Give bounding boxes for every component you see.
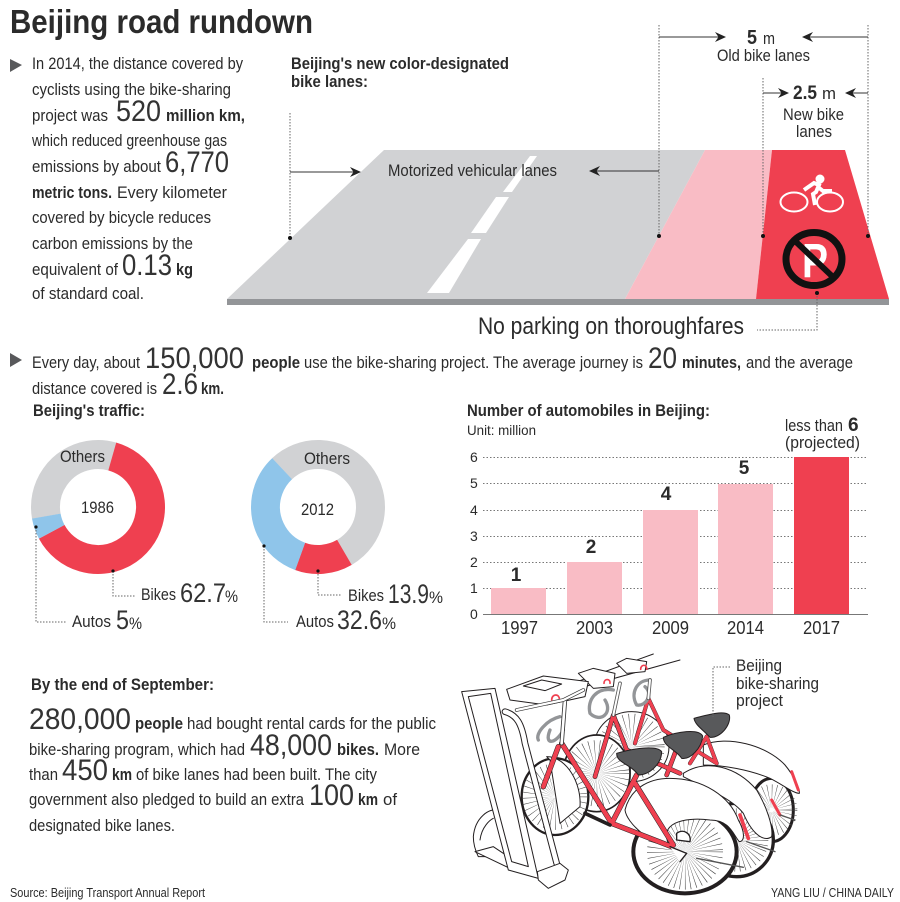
bar chart: 3: [470, 528, 478, 544]
donut chart: 1986: %: [129, 615, 142, 633]
text block: cycling distance and emissions: million km,: [166, 107, 245, 125]
heading: bike lanes: Beijing's new color-designated: [291, 55, 509, 73]
text block: cycling distance and emissions: covered by bicycle reduces: [32, 209, 211, 227]
road dimension lines and labels: [288, 25, 870, 240]
donut chart: 1986: 5: [116, 605, 129, 635]
callout: bike-sharing project: [713, 657, 819, 717]
bar chart: 1: [511, 565, 522, 586]
text block: daily use: and the average: [746, 354, 853, 372]
donut chart: 2012: %: [429, 589, 443, 607]
road dimension lines and labels: 5: [747, 27, 757, 49]
title: Beijing road rundown: [10, 3, 313, 40]
bar chart: 1: [470, 580, 478, 596]
text block: cycling distance and emissions: carbon emissions by the: [32, 235, 193, 253]
text block: daily use: minutes,: [682, 354, 741, 372]
text block: cycling distance and emissions: 520: [116, 95, 161, 128]
donut chart: 1986: Autos: [72, 613, 111, 631]
text block: cycling distance and emissions: In 2014, the distance covered by: [32, 55, 244, 73]
bar chart: 2009: [652, 618, 689, 638]
road dimension lines and labels: m: [763, 30, 775, 48]
heading: traffic: Beijing's traffic:: [33, 402, 145, 420]
donut chart: 2012: 32.6: [337, 605, 382, 635]
docking post: [462, 688, 568, 888]
text block: daily use: distance covered is: [32, 380, 157, 398]
text block: cycling distance and emissions: equivalent of: [32, 261, 118, 279]
bar chart: 6: [848, 415, 859, 436]
text block: cycling distance and emissions: metric tons.: [32, 184, 112, 202]
text block: by the end of September: than: [29, 766, 58, 784]
bar chart: 5: [470, 475, 478, 491]
text block: cycling distance and emissions: kg: [176, 261, 193, 279]
callout: bike-sharing project: Beijing: [736, 657, 782, 675]
text block: by the end of September: [29, 676, 436, 835]
text block: by the end of September: By the end of September:: [31, 676, 214, 694]
heading: bike lanes: [291, 55, 509, 91]
road dimension lines and labels: Motorized vehicular lanes: [388, 162, 557, 180]
donut chart: 1986: 1986: [81, 499, 114, 517]
text block: daily use: Every day, about: [32, 354, 140, 372]
text block: cycling distance and emissions: which reduced greenhouse gas: [31, 132, 227, 150]
bar chart: 5: [739, 458, 750, 479]
callout: bike-sharing project: bike-sharing: [736, 675, 819, 693]
callout: bike-sharing project: project: [736, 692, 783, 710]
bar chart: 4: [661, 484, 672, 505]
text block: by the end of September: 450: [62, 754, 108, 787]
text block: by the end of September: 100: [309, 779, 354, 812]
icon: no parking: [786, 232, 842, 288]
text block: cycling distance and emissions: cyclists using the bike-sharing: [32, 81, 231, 99]
donut chart: 2012: [244, 433, 443, 635]
text block: daily use: 2.6: [162, 368, 198, 401]
text block: daily use: 150,000: [145, 342, 244, 375]
donut chart: 1986: 62.7: [180, 578, 226, 608]
donut chart: 2012: Others: [304, 450, 350, 468]
bar chart: 2017: [803, 618, 840, 638]
donut chart: 2012: %: [382, 615, 396, 633]
text block: by the end of September: bikes.: [337, 741, 379, 759]
donut chart: 2012: Bikes: [348, 587, 384, 605]
text block: cycling distance and emissions: [10, 55, 245, 303]
text block: cycling distance and emissions: emissions by about: [32, 158, 161, 176]
back bike: [594, 680, 799, 842]
text block: daily use: people: [252, 354, 300, 372]
bar chart: 6: [470, 449, 478, 465]
text block: by the end of September: people: [135, 715, 183, 733]
donut chart: 2012: 2012: [301, 501, 334, 519]
text block: daily use: use the bike-sharing project. The average journey is: [304, 354, 643, 372]
donut chart: 1986: Bikes: [141, 586, 176, 604]
callout: no parking: [478, 291, 819, 340]
text block: by the end of September: bike-sharing program, which had: [29, 741, 245, 759]
road dimension lines and labels: New bike: [783, 106, 844, 124]
road dimension lines and labels: Old bike lanes: [717, 47, 810, 65]
text block: by the end of September: of bike lanes had been built. The city: [136, 766, 378, 784]
bar chart: 2: [586, 537, 596, 558]
text block: daily use: km.: [201, 380, 224, 398]
donut chart: 1986: %: [225, 588, 238, 606]
donut chart: 1986: [27, 436, 238, 635]
text block: daily use: [10, 342, 853, 401]
text block: by the end of September: government also pledged to build an extra: [29, 791, 305, 809]
donut chart: 2012: 13.9: [388, 579, 429, 609]
callout: no parking: No parking on thoroughfares: [478, 313, 744, 340]
illustration: rental bikes: [462, 654, 799, 893]
text block: cycling distance and emissions: Every kilometer: [117, 184, 227, 202]
heading: bike lanes: bike lanes:: [291, 73, 368, 91]
bar chart: 2003: [576, 618, 613, 638]
road dimension lines and labels: m: [822, 85, 836, 103]
middle bike: [563, 683, 780, 877]
heading: automobiles: [467, 402, 710, 438]
bar chart: less than: [785, 417, 843, 435]
text block: by the end of September: of: [383, 791, 397, 809]
bar chart: [470, 415, 868, 638]
rack rail and docks: [507, 654, 680, 705]
icon: no parking: P: [802, 235, 828, 288]
road diagram: [227, 150, 889, 305]
bar chart: 1997: [501, 618, 538, 638]
text block: cycling distance and emissions: 6,770: [165, 146, 229, 179]
road dimension lines and labels: lanes: [796, 123, 832, 141]
road dimension lines and labels: 2.5: [793, 83, 817, 104]
bar chart: (projected): [785, 434, 860, 452]
bar chart: 4: [470, 502, 478, 518]
icon: cyclist: [780, 174, 843, 212]
bar chart: 2014: [727, 618, 764, 638]
text block: by the end of September: km: [112, 766, 132, 784]
heading: automobiles: Unit: million: [467, 422, 536, 438]
text block: cycling distance and emissions: 0.13: [122, 249, 172, 282]
heading: automobiles: Number of automobiles in Beijing:: [467, 402, 710, 420]
text block: by the end of September: designated bike lanes.: [29, 817, 175, 835]
text block: daily use: 20: [648, 342, 677, 375]
front bike: [517, 690, 795, 893]
donut chart: 2012: Autos: [296, 613, 334, 631]
text block: cycling distance and emissions: of standard coal.: [32, 285, 144, 303]
text block: by the end of September: 48,000: [250, 729, 332, 762]
source: Source: Beijing Transport Annual Report: [10, 885, 205, 900]
donut chart: 1986: Others: [60, 448, 105, 466]
text block: cycling distance and emissions: project was: [32, 107, 108, 125]
text block: by the end of September: km: [358, 791, 378, 809]
text block: by the end of September: More: [384, 741, 420, 759]
text block: by the end of September: had bought rental cards for the public: [187, 715, 436, 733]
bar chart: 2: [470, 554, 478, 570]
text block: by the end of September: 280,000: [29, 703, 131, 736]
bar chart: 0: [470, 606, 478, 622]
